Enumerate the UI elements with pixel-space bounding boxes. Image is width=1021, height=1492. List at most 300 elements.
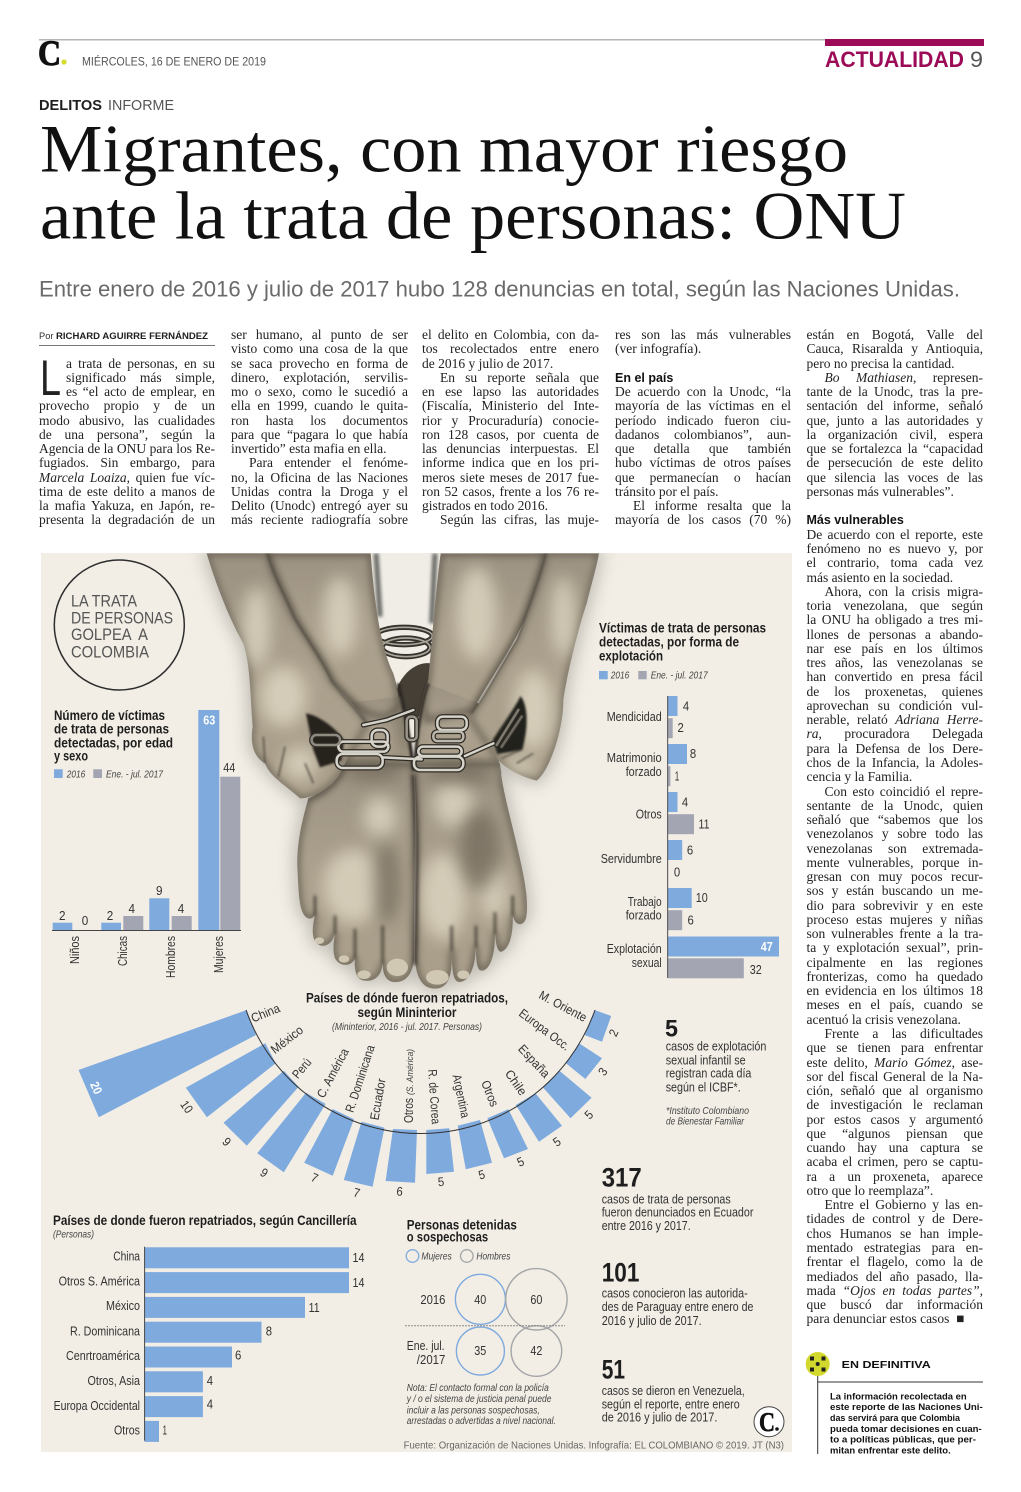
values [674,700,773,977]
byline: Por [39,331,53,341]
article column 3: (Fiscalía, Ministerio del Inte- [422,398,599,413]
article column 5: frentar el flagelo, como la de [806,1254,983,1269]
category labels [54,1250,140,1438]
category labels: Trabajo [628,895,662,909]
category labels: Matrimonio [607,751,662,765]
summary text: La información recolectada en [830,1390,967,1401]
unit note: (Personas) [53,1230,94,1241]
legend: Mujeres [421,1250,452,1262]
note [406,1383,556,1427]
article column 5: meses en el país, cuando se [806,997,983,1012]
stat: 51 cases: casos se dieron en Venezuela, [602,1384,745,1398]
article column 2: Delito (Unodc) entregó ayer su [231,498,408,513]
article column 5: de persecución de este delito [806,455,983,470]
chart heading: según Mininterior [358,1005,457,1020]
article column 2: visto como una cosa de la que [231,341,408,356]
article column 5: ra a un proxeneta, aparece [806,1169,983,1184]
kicker: INFORME [108,98,174,114]
article column 5 [806,327,983,1326]
article column 4 [615,327,791,527]
article column 5: que “algunos piensan que [806,1126,983,1141]
article column 4: que detalla que también [615,441,791,456]
legend [406,1250,511,1262]
article column 2: más reciente radiografía sobre [231,512,408,527]
byline: RICHARD AGUIRRE FERNÁNDEZ [56,331,208,341]
article column 1: tima de este delito a manos de [39,484,215,499]
bar values: 7 [352,1185,361,1201]
article column 5: tidades de control y de Dere- [806,1211,983,1226]
drop cap: L [40,350,61,406]
article column 3: en ese lapso las autoridades [422,384,599,399]
article column 5: toria venezolana, que según [806,598,983,613]
article column 1: Agencia de la ONU para los Re- [39,441,215,456]
stat: 101 cases [602,1258,753,1328]
article column 5: que silencia las voces de las [806,470,983,485]
radial bars [78,1010,611,1187]
panel: infographic [41,553,792,1452]
country labels: Perú [290,1055,314,1081]
category labels: Mendicidad [607,710,662,724]
values: 14 [352,1276,365,1290]
title: ante la trata de personas: ONU [40,177,906,253]
values: 0 [82,913,88,928]
article column 5: de investigación le reclaman [806,1097,983,1112]
values: 4 [682,796,688,810]
article column 3: tos recolectados entre enero [422,341,599,356]
heading: EN DEFINITIVA [842,1359,931,1371]
circle labels [407,1293,542,1367]
article column 5: sentante de la Unodc, quien [806,798,983,813]
page header [38,33,984,73]
article column 3: gistrados en todo 2016. [422,498,548,513]
values: 4 [178,901,184,916]
stat: 51 cases: 51 [602,1354,625,1384]
circle labels: 40 [474,1293,486,1307]
axis labels [68,936,226,978]
legend: 2016 [66,768,85,780]
category labels: forzado [626,908,662,922]
values: 4 [128,901,135,916]
callout circle: la trata de personas: DE PERSONAS [71,610,173,628]
chart heading: (Mininterior, 2016 - jul. 2017. Personas) [332,1022,482,1033]
country labels: M. Oriente [537,988,589,1025]
chart heading: y sexo [54,749,88,764]
values: 10 [696,891,708,905]
article column 2: ron hasta los documentos [231,413,408,428]
article column 5: mente vulnerables, porque in- [806,855,983,870]
stat: 51 cases: de 2016 y julio de 2017. [602,1411,717,1425]
article column 5: personas más vulnerables”. [806,484,954,499]
category labels: Europa Occidental [54,1399,140,1413]
values [162,1251,365,1438]
chart heading: Víctimas de trata de personas [599,621,766,636]
article column 5: gresan con muy pocos recur- [806,869,983,884]
article column 5: sor del fiscal General de la Na- [806,1069,983,1084]
callout circle: la trata de personas: COLOMBIA [71,643,149,661]
chart: detained or suspected persons [405,1217,567,1427]
chart heading [599,621,766,664]
article column 5: que se fortalezca la “capacidad [806,441,983,456]
note: y / o el sistema de justicia penal puede [406,1394,552,1405]
article column 5: cencia y la Familia. [806,769,912,784]
note: Nota: El contacto formal con la policía [407,1383,549,1394]
circle labels: 60 [530,1293,542,1307]
bar values: 5 [515,1154,526,1170]
summary text: mitan enfrentar este delito. [830,1444,951,1455]
category labels: Otros [114,1424,140,1438]
chain [312,710,522,770]
article column 4: De acuerdo con la Unodc, “la [615,384,791,399]
values: 63 [203,712,215,728]
article column 2: Unidas contra la Droga y el [231,484,408,499]
values: 2 [678,721,684,735]
stat: 5 cases: casos de explotación [666,1040,766,1054]
article column 5: proceso estas mujeres y niñas [806,912,983,927]
article column 5: nerable, relató Adriana Herre- [806,712,983,727]
kicker: DELITOS [39,98,102,114]
article column 4: res son las más vulnerables [615,327,791,342]
article column 5: señaló que “sabemos que los [806,812,983,827]
country labels: C. América [314,1046,352,1100]
stat: 317 cases: 317 [602,1163,642,1193]
stat: 317 cases: entre 2016 y 2017. [602,1219,691,1233]
bar values: 5 [550,1134,564,1150]
back chain [376,627,432,657]
article column 3: meros siete meses de 2017 fue- [422,470,599,485]
stat: 101 cases: des de Paraguay entre enero de [602,1300,753,1314]
article column 3 [422,327,599,527]
values: 4 [207,1374,213,1388]
article column 5: ción, señaló que al organismo [806,1083,983,1098]
stat: 317 cases: fueron denunciados en Ecuador [602,1206,753,1220]
category labels: Otros S. América [59,1274,140,1288]
values: 6 [688,914,694,928]
bar values: 9 [257,1165,271,1181]
bar values [87,1027,621,1201]
article column 1: de una persona”, según la [39,427,215,442]
article column 5: pero no precisa la cantidad. [806,356,955,371]
article column 2: invertido” esta mafia en ella. [231,441,387,456]
article column 3: de 2016 y julio de 2017. [422,356,553,371]
stat: 5 cases [665,1016,766,1128]
category labels: forzado [626,765,662,779]
article column 2: no, la Oficina de las Naciones [231,470,408,485]
article column 5: más asiento en la sociedad. [806,570,953,585]
page number: 9 [970,47,983,72]
country labels [249,988,589,1125]
stat: 5 cases: registran cada día [666,1067,751,1081]
legend: Ene. - jul. 2017 [106,768,164,780]
circle labels: 2016 [420,1293,445,1307]
dark hollows behind the hands [306,713,344,767]
values: 8 [690,747,696,761]
chart heading: detectadas, por forma de [599,635,739,650]
chart: victims by exploitation type [599,621,779,978]
bars [667,696,779,978]
values: 44 [223,760,235,775]
logo: C [38,33,61,73]
article column 2: se saca provecho en forma de [231,356,408,371]
bars [52,710,241,931]
category labels: México [106,1299,140,1313]
article column 3: ron 128 casos, por cuenta de [422,427,599,442]
bar values: 2 [606,1027,621,1039]
stat: 101 cases: casos conocieron las autorida- [602,1287,748,1301]
article column 5: Cauca, Risaralda y Antioquia, [806,341,983,356]
note: arrestadas o advertidas a nivel nacional. [407,1416,556,1427]
title: Migrantes, con mayor riesgo [40,111,848,187]
article column 3: En su reporte señala que [440,370,599,385]
circle labels: 42 [530,1344,542,1358]
bar values: 5 [582,1108,596,1122]
illustration: chained feet and hands [207,553,599,989]
country labels: Otros [402,1098,416,1123]
country labels: China [249,1001,282,1025]
article column 2: ser humano, al punto de ser [231,327,408,342]
article column 1: fugiados. Sin embargo, para [39,455,215,470]
article column 2: mo o sexo, como le sucedió a [231,384,408,399]
article column 5: Entre el Gobierno y las en- [824,1197,983,1212]
values: 4 [683,700,689,714]
article column 5: mentado estrategias para en- [806,1240,983,1255]
article column 5: mediados del año pasado, lla- [806,1269,983,1284]
article column 5: en evidencia en los últimos 18 [806,983,983,998]
values: 11 [309,1301,320,1315]
article column 2: ella en 1999, cuando le quita- [231,398,408,413]
stat: 317 cases [602,1163,753,1233]
category labels: Explotación [607,942,662,956]
values: 32 [750,963,762,977]
article column 1: la mafia Yakuza, en Japón, re- [39,498,215,513]
article column 4: El informe resalta que la [633,498,791,513]
values: 2 [59,908,66,923]
crease lines and fingers [263,553,547,783]
country labels: (S. América) [405,1049,416,1095]
stat: 51 cases [602,1354,745,1425]
category labels [601,710,662,970]
circle labels: /2017 [417,1353,445,1367]
article column 5: dio para sobrevivir y en este [806,898,983,913]
summary text: das servirá para que Colombia [830,1412,961,1423]
kicker [39,98,174,114]
category labels: Cenrtroamérica [66,1349,140,1363]
values: 4 [207,1398,213,1412]
icon: yellow converging arrows [806,1352,830,1376]
country labels: R. Dominicana [343,1043,378,1114]
article column 5: cuando hay una captura se [806,1140,983,1155]
category labels: Otros [636,808,662,822]
article column 4: (ver infografía). [615,341,701,356]
chart: victims by age and sex [52,708,241,978]
article column 5: fronterizas, como ha quedado [806,969,983,984]
footnote: de Bienestar Familiar [666,1116,745,1128]
bar values: 3 [595,1065,611,1078]
footnote [666,1106,749,1128]
article column 3: informe indica que en los pri- [422,455,599,470]
article column 5: llones de personas a abando- [806,627,983,642]
summary text: to a políticas públicas, que per- [830,1434,976,1445]
stat: 5 cases: 5 [665,1016,678,1043]
stat: 101 cases: 101 [602,1258,639,1288]
category labels: Otros, Asia [88,1374,140,1388]
box: en definitiva [806,1352,983,1455]
article column 3: rior y Procuraduría) conocie- [422,413,599,428]
axis labels: Mujeres [212,936,226,973]
bar values: 6 [396,1184,403,1199]
values: 2 [107,908,113,923]
article column 1: provecho propio y de un [39,398,215,413]
footnote: *Instituto Colombiano [666,1106,749,1117]
chart heading: Países de dónde fueron repatriados, [306,991,508,1006]
values [59,712,235,928]
chart heading: Personas detenidas [407,1217,517,1232]
stat: 51 cases: según el reporte, entre enero [602,1398,740,1412]
axis labels: Niños [68,936,82,964]
article column 5: Ahora, con la crisis migra- [824,584,983,599]
values: 1 [162,1424,167,1438]
article column 3: Según las cifras, las muje- [440,512,599,527]
legend: Hombres [476,1250,511,1262]
article column 5: el contrario, toma cada vez [806,555,983,570]
article column 1: es “el acto de emplear, en [66,384,215,399]
article column 5: Más vulnerables [806,513,904,527]
article column 5: este delito, Mario Gómez, ase- [806,1055,983,1070]
country labels: Otros [478,1078,501,1109]
article column 5: que se tienen para enfrentar [806,1040,983,1055]
article column 5: ra, procuradora Delegada [806,726,983,741]
legend [54,768,164,780]
article column 2 [231,327,408,527]
chart heading: Número de víctimas [54,708,165,723]
values: 11 [698,818,710,832]
article column 5: acaba el crimen, pero se captu- [806,1154,983,1169]
article column 1: presenta la degradación de un [39,512,215,527]
article column 5: cipalmente en las regiones [806,955,983,970]
article column 5: fenómeno no es nuevo y, por [806,541,983,556]
title [40,111,906,253]
section name: ACTUALIDAD [825,47,964,72]
article column 4: dadanos colombianos”, aun- [615,427,791,442]
summary text [830,1390,983,1455]
legend: Ene. - jul. 2017 [651,670,709,682]
article column 5: están en Bogotá, Valle del [806,327,983,342]
article column 5: mada “Ojos en todas partes”, [806,1283,983,1298]
article column 5: para denunciar estos casos ■ [806,1311,964,1326]
chart: countries according to Cancillería [53,1213,365,1442]
article column 5: tres años, las venezolanas se [806,655,983,670]
article column 5: son vulnerables frente a la tra- [806,926,983,941]
article column 4: mayoría de las víctimas en el [615,398,791,413]
article column 5: otro que lo reemplaza”. [806,1183,933,1198]
article column 2: dinero, explotación, servilis- [231,370,408,385]
bar values: 10 [177,1098,196,1116]
article column 5: de los proxenetas, quienes [806,684,983,699]
article column 5: sentación del informe, señaló [806,398,983,413]
article column 5: venezolanos y sobre todo las [806,826,983,841]
category labels: China [113,1250,140,1264]
article column 5: chos de la Infancia, la Adoles- [806,755,983,770]
stat: 101 cases: 2016 y julio de 2017. [602,1314,702,1328]
article column 5: venezolanas son extremada- [806,841,983,856]
article column 4: que permanecían o hacían [615,470,791,485]
logo badge [754,1407,784,1437]
article column 4: período indicado fueron ciu- [615,413,791,428]
article column 5: ta y explotación sexual”, prin- [806,940,983,955]
article column 1 [38,356,215,527]
article column 1: modo abusivo, las cualidades [39,413,215,428]
stat: 317 cases: casos de trata de personas [602,1192,731,1206]
article column 5: la ONU ha obligado a tres mi- [806,612,983,627]
country labels: Chile [502,1067,530,1098]
summary text: pueda tomar decisiones en cuan- [830,1423,982,1434]
note: incluir a las personas sospechosas, [407,1405,540,1416]
callout circle: la trata de personas: LA TRATA [71,593,137,611]
chart heading: de trata de personas [54,722,169,736]
circle labels: Ene. jul. [407,1339,445,1353]
country labels: Europa Occ. [516,1006,573,1053]
country labels: España [515,1042,553,1081]
values: 1 [675,770,679,784]
callout circle: la trata de personas [54,560,184,690]
values: 14 [352,1251,365,1265]
country labels: Ecuador [368,1077,389,1121]
logo badge: C [759,1407,775,1437]
bar values: 9 [219,1135,234,1149]
category labels: Servidumbre [601,852,662,866]
bar values: 5 [477,1167,487,1183]
article column 5: para la Defensa de los Dere- [806,741,983,756]
article column 2: para que “pagara lo que había [231,427,408,442]
chart heading [306,991,508,1033]
article column 5: tante de la Unodc, tras la pre- [806,384,983,399]
country labels: R. de Corea [425,1069,443,1125]
article column 5: que buscó dar información [806,1297,983,1312]
circle labels: 35 [474,1344,486,1358]
values: 0 [674,866,680,880]
category labels: sexual [632,956,662,970]
article column 5: la organización civil, espera [806,427,983,442]
date: MIÉRCOLES, 16 DE ENERO DE 2019 [82,56,266,68]
article column 4: En el país [615,371,673,385]
article column 4: hubo víctimas de otros países [615,455,791,470]
axis labels: Chicas [116,936,130,966]
legend [599,670,709,682]
article column 5: De acuerdo con el reporte, este [806,527,983,542]
chart heading: detectadas, por edad [54,735,173,750]
toes and foot centre line [315,777,513,963]
article column 5: nar ese país en los últimos [806,641,983,656]
article column 5: aprovechan su condición vul- [806,698,983,713]
source line: Fuente: Organización de Naciones Unidas. Infografía: EL COLOMBIANO © 2019. JT (N3) [404,1440,784,1452]
article column 5: Con esto coincidió el repre- [824,784,983,798]
article column 5: que, junto a las autoridades y [806,413,983,428]
bar values: 7 [309,1170,320,1186]
country labels: Argentina [449,1073,472,1119]
values: 8 [266,1324,272,1338]
article column 3: ron 52 casos, frente a los 76 re- [422,484,599,499]
chart heading: explotación [599,649,663,664]
article column 5: por estos casos y argumentó [806,1112,983,1127]
stat: 5 cases: según el ICBF*. [666,1080,741,1094]
chart heading: Países de donde fueron repatriados, según Cancillería [53,1213,357,1228]
callout circle: la trata de personas: GOLPEA A [71,626,148,644]
panel background [41,553,792,1452]
bar values: 5 [437,1175,445,1189]
summary text: este reporte de las Naciones Uni- [830,1401,983,1412]
legend: 2016 [610,670,629,682]
article column 2: Para entender el fenóme- [249,455,408,470]
stat: 5 cases: sexual infantil se [666,1053,746,1067]
